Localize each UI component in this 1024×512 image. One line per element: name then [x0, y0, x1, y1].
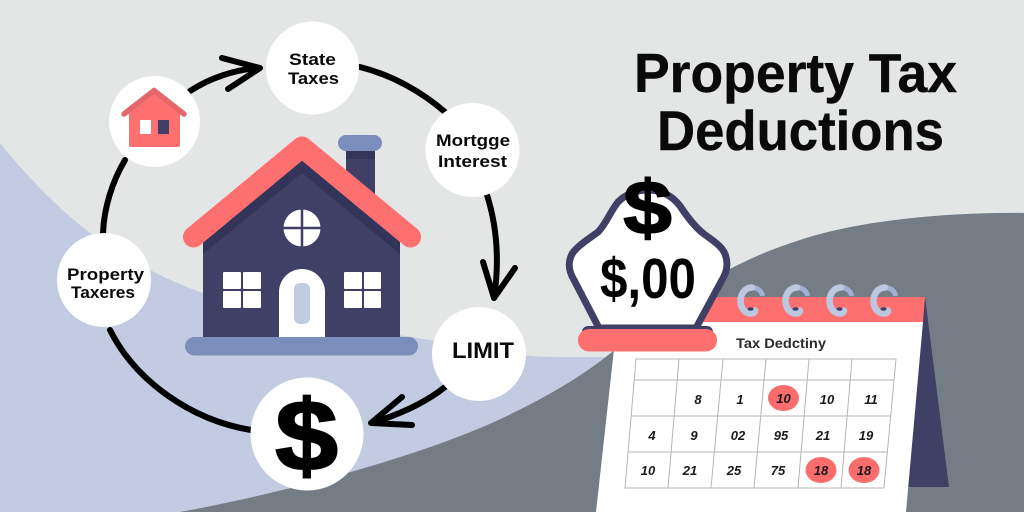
chimney	[346, 148, 375, 200]
title line 2: Deductions	[657, 99, 944, 162]
calendar numbers: 75	[771, 463, 786, 478]
node: property taxes: Taxeres	[71, 283, 135, 302]
node: dollar	[250, 378, 364, 492]
node: state taxes	[266, 22, 359, 114]
calendar header	[617, 297, 925, 322]
calendar sheet	[596, 322, 923, 512]
node: dollar: $	[275, 379, 338, 492]
roof	[194, 147, 410, 237]
tag amount: $,00	[600, 247, 696, 311]
rings	[740, 287, 896, 314]
calendar numbers: 10	[641, 463, 656, 478]
calendar numbers: 9	[690, 428, 698, 443]
node: limit	[432, 307, 526, 401]
node: limit: LIMIT	[452, 338, 514, 363]
node: state taxes: Taxes	[288, 69, 339, 88]
calendar numbers: 21	[682, 463, 697, 478]
tag outline	[569, 190, 727, 328]
cycle arrows	[103, 58, 515, 430]
right window	[344, 272, 381, 308]
node: mortgage interest: Mortgge	[436, 131, 510, 150]
calendar numbers: 25	[726, 463, 742, 478]
light blue wave	[0, 143, 625, 512]
price tag	[569, 166, 727, 352]
calendar numbers: 10	[776, 391, 791, 406]
house body	[203, 160, 400, 340]
tag base stripe	[582, 326, 713, 338]
tag base	[578, 329, 717, 352]
calendar numbers: 8	[694, 392, 702, 407]
node: mortgage interest	[426, 103, 520, 197]
calendar numbers: 19	[859, 428, 874, 443]
grey wave	[180, 213, 1024, 512]
door	[279, 269, 325, 338]
icon: small house	[124, 90, 184, 147]
base	[185, 337, 418, 356]
calendar numbers: 1	[736, 392, 744, 407]
left window	[223, 272, 261, 308]
calendar numbers: 02	[731, 428, 746, 443]
calendar numbers: 18	[857, 463, 872, 478]
title: Property Tax	[634, 42, 957, 104]
node: state taxes: State	[289, 50, 336, 69]
calendar back stand	[900, 297, 949, 487]
calendar grid	[625, 359, 896, 488]
calendar numbers: 18	[814, 463, 829, 478]
tag dollar sign: $	[623, 166, 672, 251]
calendar numbers: 4	[647, 428, 656, 443]
calendar numbers: 95	[774, 428, 789, 443]
node: mortgage interest: Interest	[438, 152, 507, 171]
node: property taxes	[57, 233, 151, 327]
calendar numbers	[641, 391, 878, 478]
node: property taxes: Property	[67, 265, 145, 284]
round window	[283, 209, 321, 247]
calendar numbers: 11	[864, 392, 878, 407]
calendar title: Tax Dedctiny	[736, 336, 827, 351]
calendar numbers: 21	[815, 428, 830, 443]
calendar numbers: 10	[820, 392, 835, 407]
node: house icon	[109, 76, 200, 167]
main house	[185, 135, 418, 356]
highlighted dates	[768, 385, 880, 483]
calendar	[596, 287, 949, 512]
